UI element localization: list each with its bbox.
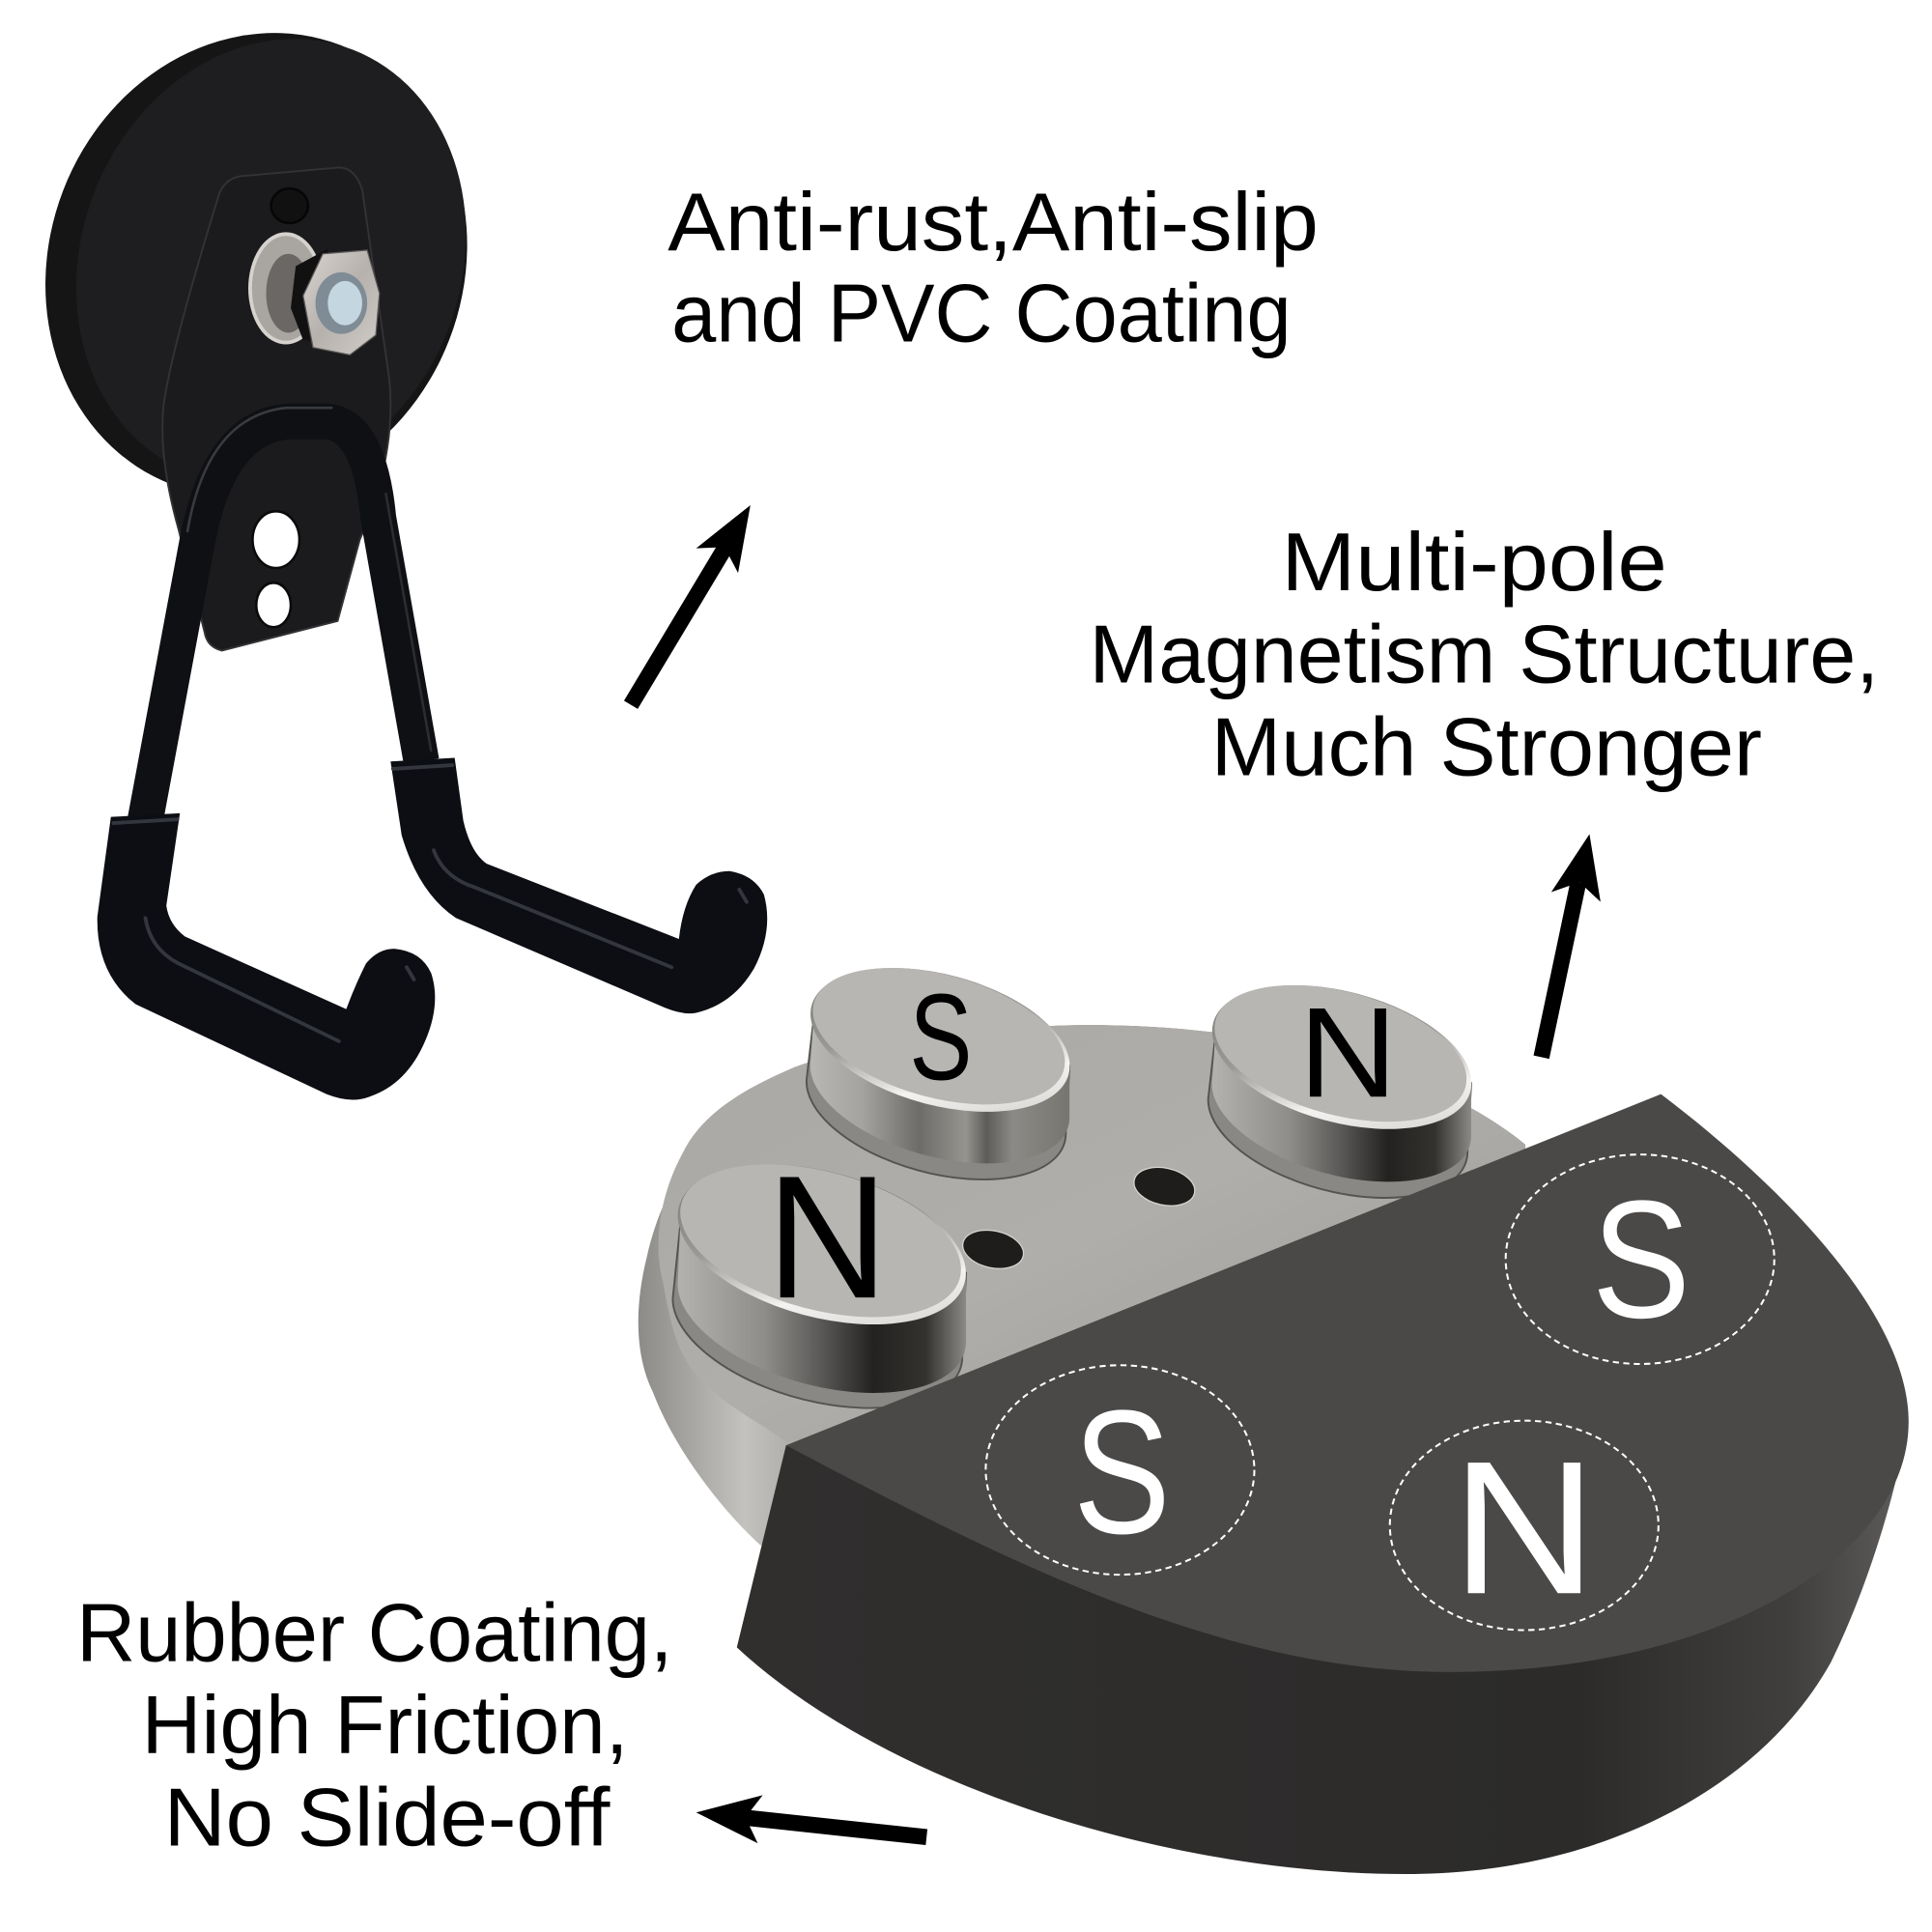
- callout: rubber coating: No Slide-off: [164, 1773, 611, 1864]
- pole marker: S: S: [1592, 1166, 1690, 1353]
- pole marker: S: S: [1073, 1374, 1171, 1571]
- arrow: to coating callout: [631, 505, 751, 705]
- arrow: to magnetism callout: [1542, 835, 1601, 1057]
- bolt and nut: [250, 234, 380, 355]
- magnet disc: [0, 0, 534, 558]
- callout: anti-rust coating: [668, 177, 1319, 359]
- steel base ring: [639, 1025, 1525, 1545]
- screw hole: [959, 1225, 1027, 1274]
- pole marker: N: [1390, 1421, 1659, 1634]
- callout: rubber coating: [76, 1587, 672, 1864]
- left rubber sleeve: [98, 813, 435, 1099]
- callout: rubber coating: High Friction,: [142, 1680, 629, 1772]
- rubber coating side: [737, 1422, 1909, 1874]
- magnet cylinder: S: S: [909, 969, 972, 1106]
- callout: multi-pole magnetism: Much Stronger: [1211, 701, 1762, 793]
- callout: multi-pole magnetism: Magnetism Structure,: [1090, 610, 1879, 701]
- pole marker: N: N: [1452, 1421, 1597, 1634]
- magnet cylinder: N: [1196, 959, 1488, 1198]
- sleeve highlights: [113, 765, 747, 1041]
- magnet cylinder: large N: [660, 1136, 983, 1408]
- callout: rubber coating: Rubber Coating,: [76, 1587, 672, 1679]
- arrow: to rubber coating callout: [696, 1795, 926, 1843]
- product photo: magnetic hook: [0, 0, 767, 1099]
- magnet cylinder: large N: N: [766, 1140, 889, 1335]
- callout: multi-pole magnetism: [1090, 517, 1879, 793]
- rubber coating top: [786, 1094, 1909, 1672]
- callout: multi-pole magnetism: Multi-pole: [1282, 517, 1667, 609]
- pole marker: S: [985, 1365, 1254, 1575]
- mounting plate: [162, 167, 390, 650]
- hook wire: [146, 408, 431, 819]
- callout: anti-rust coating: Anti-rust,Anti-slip: [668, 177, 1319, 269]
- right rubber sleeve: [390, 757, 767, 1013]
- callout: anti-rust coating: and PVC Coating: [671, 268, 1292, 359]
- steel base surface: [659, 1025, 1528, 1441]
- magnet cylinder: S: [795, 943, 1086, 1179]
- pole marker: S: [1506, 1154, 1775, 1364]
- magnet cylinder: N: N: [1298, 981, 1397, 1124]
- product cutaway: magnet base: [639, 943, 1909, 1874]
- screw hole: [1130, 1162, 1199, 1211]
